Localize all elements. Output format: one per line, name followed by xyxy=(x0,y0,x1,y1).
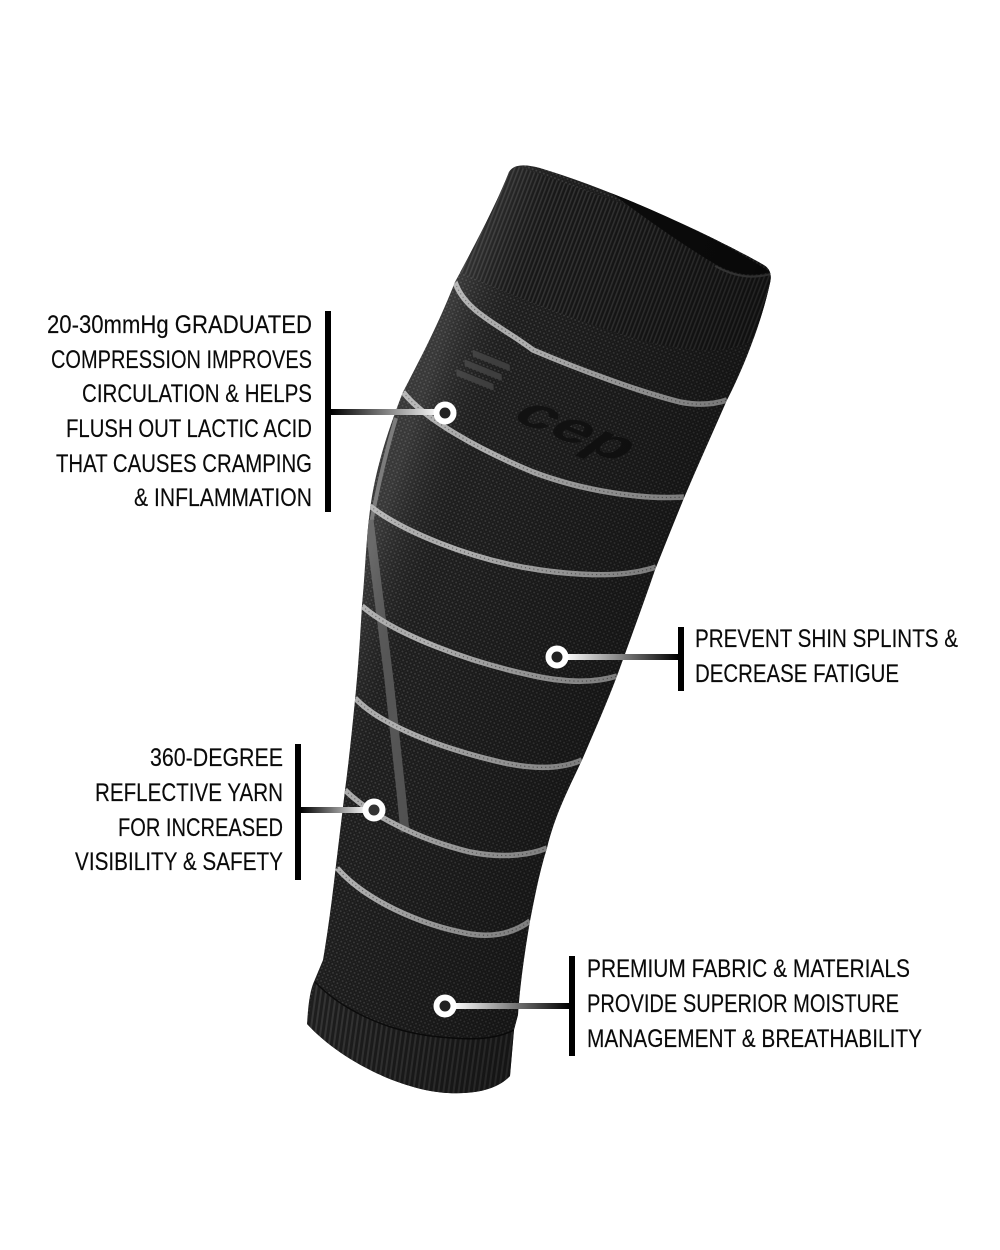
callout: premium fabric xyxy=(436,955,922,1056)
callout text xyxy=(75,744,283,876)
callout bar xyxy=(569,956,575,1056)
connector line xyxy=(301,807,367,813)
callout text: 20-30mmHg GRADUATED xyxy=(47,311,312,339)
callout bar xyxy=(325,311,331,512)
callout text xyxy=(695,625,958,688)
callout: graduated compression xyxy=(47,311,454,512)
reflective seam lower xyxy=(369,520,405,832)
callout text: CIRCULATION & HELPS xyxy=(82,380,312,408)
callout text xyxy=(587,955,922,1053)
callout text: 360-DEGREE xyxy=(150,744,283,772)
reflective seam upper xyxy=(371,418,396,524)
callout text: MANAGEMENT & BREATHABILITY xyxy=(587,1025,922,1053)
callout bar xyxy=(678,627,684,691)
rim highlight xyxy=(715,266,771,277)
stripe knit detail xyxy=(337,282,727,935)
marker dot xyxy=(436,404,454,422)
callout text xyxy=(47,311,312,512)
marker dot xyxy=(548,648,566,666)
callout: reflective yarn xyxy=(75,744,382,880)
callout text: FOR INCREASED xyxy=(118,814,283,842)
callout text: COMPRESSION IMPROVES xyxy=(51,346,312,374)
connector line xyxy=(331,409,440,415)
callout text: & INFLAMMATION xyxy=(134,484,312,512)
brand logo: cep xyxy=(500,389,656,470)
ribbed top band xyxy=(460,160,780,350)
reflective stripes xyxy=(337,282,727,935)
connector line xyxy=(565,654,678,660)
connector line xyxy=(453,1003,569,1009)
callout text: PROVIDE SUPERIOR MOISTURE xyxy=(587,990,899,1018)
sleeve shading xyxy=(356,166,771,1094)
callout bar xyxy=(295,744,301,880)
callout text: PREMIUM FABRIC & MATERIALS xyxy=(587,955,910,983)
brand logo xyxy=(456,350,632,458)
cuff seam shadow xyxy=(315,982,514,1039)
callout text: THAT CAUSES CRAMPING xyxy=(56,450,312,478)
sleeve knit body xyxy=(307,165,771,1093)
marker dot xyxy=(366,802,382,818)
ankle cuff xyxy=(307,982,514,1093)
callout text: REFLECTIVE YARN xyxy=(95,779,283,807)
compression calf sleeve xyxy=(300,160,780,1100)
marker dot xyxy=(436,998,454,1014)
callout text: VISIBILITY & SAFETY xyxy=(75,848,283,876)
callout: shin splints xyxy=(548,625,958,691)
sleeve opening interior xyxy=(610,192,770,275)
callout text: FLUSH OUT LACTIC ACID xyxy=(66,415,312,443)
callout text: DECREASE FATIGUE xyxy=(695,660,899,688)
